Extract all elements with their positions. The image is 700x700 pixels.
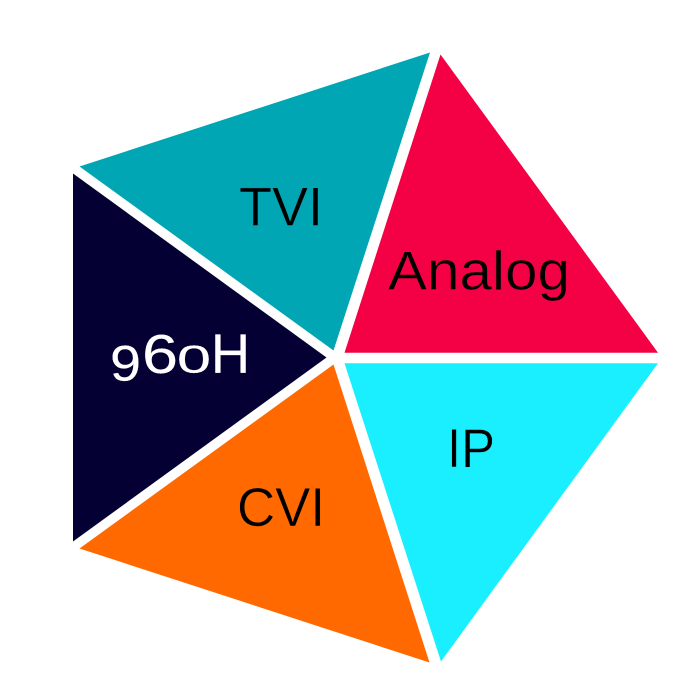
segment: 960H: 6 xyxy=(142,323,178,385)
segment: Analog xyxy=(344,54,658,353)
segment: 960H: 0 xyxy=(177,338,211,382)
segment: 960H xyxy=(73,174,326,542)
segment: 960H: 9 xyxy=(110,336,141,392)
segment: Analog: Analog xyxy=(388,240,570,302)
segment: CVI xyxy=(80,364,430,662)
segment: TVI xyxy=(80,52,430,350)
segment: 960H: H xyxy=(211,322,250,385)
segment: CVI: CVI xyxy=(237,476,325,538)
segment: IP: IP xyxy=(447,417,495,479)
segment: TVI: TVI xyxy=(239,176,323,238)
segment: IP xyxy=(344,363,658,662)
